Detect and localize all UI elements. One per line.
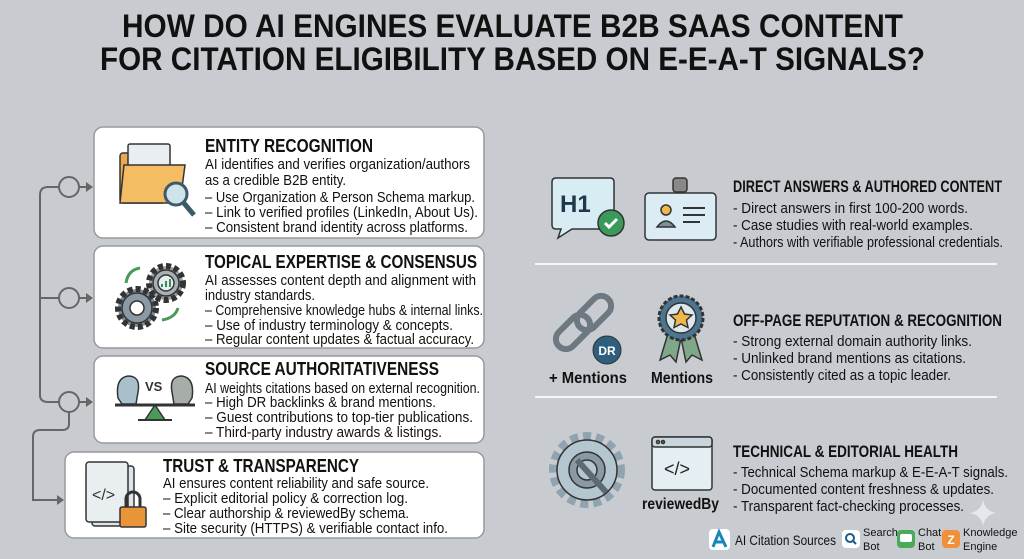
section: technical health (553, 436, 1008, 515)
legend: Engine (963, 541, 997, 553)
icon: gear wrench (553, 436, 621, 504)
panel: topical expertise: – Regular content updates & factual accuracy. (205, 332, 474, 348)
icon: scale vs: VS (145, 379, 163, 394)
panel: entity recognition: – Consistent brand identity across platforms. (205, 220, 468, 236)
panel: topical expertise: AI assesses content depth and alignment with (205, 273, 476, 289)
panel: trust & transparency: – Clear authorship & reviewedBy schema. (163, 506, 409, 522)
icon: browser code: reviewedBy (642, 496, 719, 513)
panel: entity recognition: ENTITY RECOGNITION (205, 136, 373, 156)
icon: gears (118, 266, 183, 327)
icon: medal (651, 296, 713, 387)
icon: folder with magnifier (120, 144, 194, 215)
panel: source authoritativeness (94, 356, 484, 443)
panel: source authoritativeness: AI weights citations based on external recognition. (205, 381, 480, 397)
panel: entity recognition (94, 127, 484, 238)
connector flow arrows (33, 177, 93, 505)
section: off-page reputation (549, 292, 1002, 387)
panel: trust & transparency (65, 452, 484, 538)
panel: topical expertise: TOPICAL EXPERTISE & CONSENSUS (205, 252, 477, 272)
legend: AI Citation Sources (735, 532, 836, 548)
legend: Search (863, 527, 898, 539)
panel: entity recognition: – Use Organization & Person Schema markup. (205, 190, 475, 206)
legend: Knowledge (963, 527, 1017, 539)
section: technical health: - Transparent fact-checking processes. (733, 499, 964, 515)
icon: document with lock (86, 462, 146, 527)
icon: chain with DR (549, 292, 627, 387)
section: off-page reputation: - Unlinked brand mentions as citations. (733, 351, 966, 367)
icon: scale vs (115, 376, 195, 420)
legend: Chat (918, 527, 941, 539)
section: technical health: - Documented content freshness & updates. (733, 482, 994, 498)
section: direct answers: - Direct answers in first 100-200 words. (733, 201, 968, 217)
panel: trust & transparency: – Explicit editorial policy & correction log. (163, 491, 408, 507)
icon: document with lock: </> (92, 487, 115, 504)
section: off-page reputation: - Consistently cited as a topic leader. (733, 368, 951, 384)
panel: source authoritativeness: – Third-party industry awards & listings. (205, 425, 442, 441)
panel: trust & transparency: AI ensures content reliability and safe source. (163, 476, 429, 492)
panel: trust & transparency: TRUST & TRANSPARENCY (163, 456, 359, 476)
section: technical health: TECHNICAL & EDITORIAL HEALTH (733, 442, 958, 461)
panel: topical expertise: – Use of industry terminology & concepts. (205, 318, 453, 334)
panel: topical expertise: – Comprehensive knowledge hubs & internal links. (205, 303, 483, 319)
panel: source authoritativeness: – High DR backlinks & brand mentions. (205, 395, 436, 411)
icon: browser code (642, 437, 719, 513)
panel: source authoritativeness: SOURCE AUTHORITATIVENESS (205, 359, 439, 379)
icon: H1 bubble: H1 (560, 191, 591, 218)
legend: Z (947, 533, 955, 547)
title: FOR CITATION ELIGIBILITY BASED ON E-E-A-T SIGNALS? (100, 41, 925, 77)
legend: Bot (918, 541, 935, 553)
legend (709, 527, 1017, 553)
icon: chain with DR: DR (598, 344, 616, 358)
icon: medal: Mentions (651, 370, 713, 387)
section: direct answers: - Case studies with real-world examples. (733, 218, 973, 234)
panel: entity recognition: AI identifies and verifies organization/authors (205, 157, 470, 173)
icon: sparkle (970, 500, 996, 526)
icon: H1 bubble (552, 178, 624, 238)
title (100, 8, 925, 77)
icon: chain with DR: + Mentions (549, 370, 627, 387)
icon: browser code: </> (664, 459, 690, 479)
icon: ID badge (645, 178, 716, 240)
title: HOW DO AI ENGINES EVALUATE B2B SAAS CONTENT (122, 8, 903, 44)
panel: entity recognition: – Link to verified profiles (LinkedIn, About Us). (205, 205, 478, 221)
section: direct answers (552, 177, 1003, 251)
section: off-page reputation: - Strong external domain authority links. (733, 334, 972, 350)
panel: trust & transparency: – Site security (HTTPS) & verifiable contact info. (163, 521, 448, 537)
panel: topical expertise: industry standards. (205, 288, 315, 304)
panel: topical expertise (94, 246, 484, 348)
legend: Bot (863, 541, 880, 553)
panel: entity recognition: as a credible B2B entity. (205, 173, 346, 189)
panel: source authoritativeness: – Guest contributions to top-tier publications. (205, 410, 473, 426)
